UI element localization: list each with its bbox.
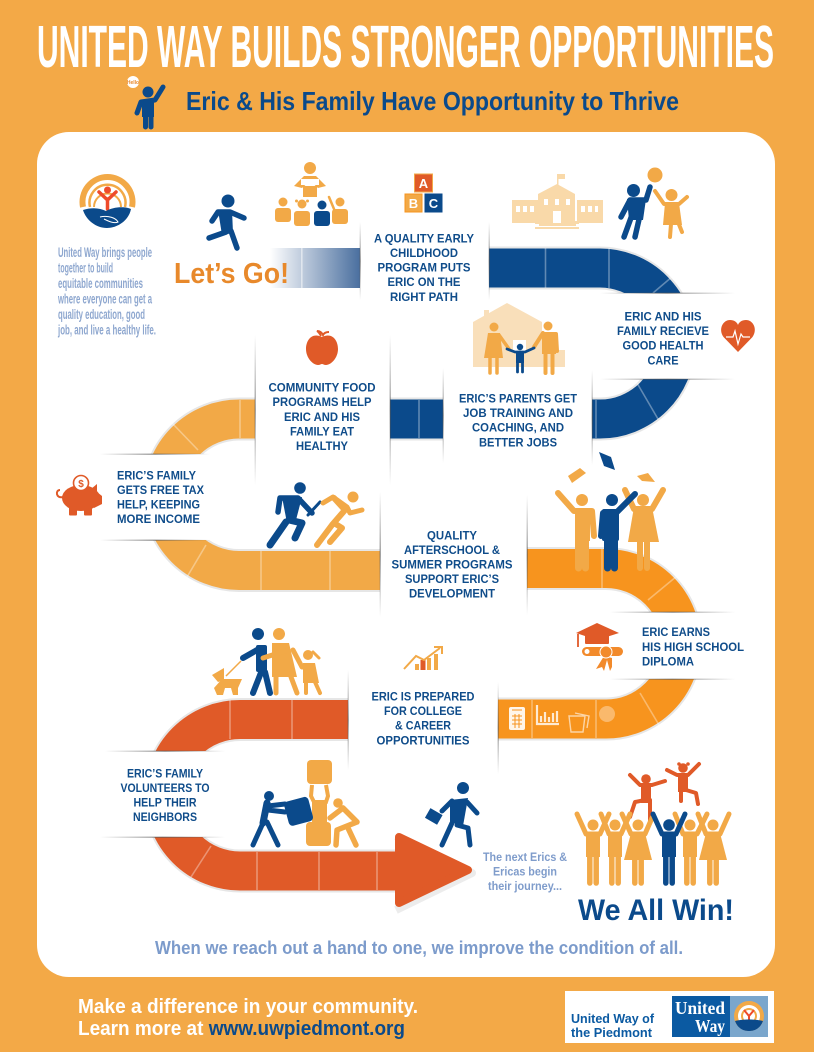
figures: yellow crowd — [577, 814, 729, 883]
text: afterschool: SUPPORT ERIC’S — [405, 572, 499, 586]
panel: community food — [254, 325, 391, 488]
text: job training: COACHING, AND — [472, 420, 564, 434]
text: job training: ERIC’S PARENTS GET — [459, 392, 577, 406]
text: volunteers: VOLUNTEERS TO — [120, 781, 210, 795]
icon: apple — [306, 331, 338, 365]
text: afterschool: AFTERSCHOOL & — [404, 543, 500, 557]
panel: afterschool — [380, 490, 528, 621]
icon: running Eric — [209, 194, 244, 248]
icon: house with family — [473, 303, 565, 373]
text: college and career: ERIC IS PREPARED — [372, 690, 475, 704]
text: job training — [459, 392, 577, 450]
text: tax help: MORE INCOME — [117, 512, 200, 526]
text: tax help: GETS FREE TAX — [117, 483, 205, 497]
text: college and career: & CAREER — [395, 718, 451, 732]
subtitle: Eric & His Family Have Opportunity to Thrive — [186, 86, 679, 116]
icon: school building — [512, 174, 603, 229]
text: early childhood: PROGRAM PUTS — [378, 260, 470, 274]
text: tax help: HELP, KEEPING — [117, 498, 200, 512]
text: intro blurb: together to build — [58, 260, 113, 276]
text: next Erics — [483, 850, 567, 893]
text: afterschool: QUALITY — [427, 528, 477, 542]
heading: We All Win: We All Win! — [578, 894, 734, 927]
text: volunteers: ERIC’S FAMILY — [127, 766, 203, 780]
panel: volunteers — [100, 750, 260, 838]
text: early childhood: ERIC ON THE — [388, 275, 460, 289]
text: job training: BETTER JOBS — [479, 436, 557, 450]
footer logo — [565, 991, 774, 1043]
panel: health care — [600, 292, 735, 380]
text: community food — [268, 380, 376, 453]
text: intro blurb — [57, 244, 156, 338]
text: intro blurb: United Way brings people — [58, 244, 152, 260]
text: diploma — [642, 625, 744, 668]
icon: crowd celebrating — [577, 762, 729, 883]
text: early childhood: A QUALITY EARLY — [374, 232, 474, 246]
figure: red climber — [630, 774, 665, 822]
panel: diploma — [600, 612, 744, 680]
footer logo: Way — [695, 1016, 725, 1036]
path: dark orange segment — [490, 549, 681, 738]
icon: ABC blocks: B — [409, 196, 418, 211]
text: volunteers — [120, 766, 210, 824]
icon: heart — [721, 320, 755, 352]
text: next Erics: Ericas begin — [493, 864, 557, 878]
text: community food: FAMILY EAT — [290, 424, 354, 438]
text: community food: ERIC AND HIS — [284, 410, 360, 424]
text: health care: GOOD HEALTH — [622, 338, 704, 352]
footer logo: the Piedmont — [571, 1025, 653, 1040]
icon: family walking dog — [212, 628, 320, 695]
text: early childhood: CHILDHOOD — [390, 246, 458, 260]
text: college and career: FOR COLLEGE — [384, 704, 462, 718]
icon: graduates — [558, 452, 663, 568]
icon: kids playing ball — [621, 168, 687, 237]
panel: job training — [442, 368, 593, 468]
icon: relay runners — [270, 482, 362, 545]
icon: ABC blocks: A — [419, 176, 429, 191]
text: volunteers: NEIGHBORS — [133, 810, 197, 824]
figure: blue person — [653, 814, 685, 883]
text: intro blurb: quality education, good — [58, 306, 145, 322]
path: light orange segment — [163, 400, 385, 590]
text: tax help: ERIC’S FAMILY — [117, 468, 196, 482]
icon: United Way hand logo — [82, 177, 133, 228]
text: volunteers: HELP THEIR — [134, 796, 197, 810]
text: intro blurb: equitable communities — [58, 275, 143, 291]
icon: Eric waving hello: Hello — [127, 80, 139, 86]
text: intro blurb: job, and live a healthy life. — [57, 322, 156, 338]
icon: piggy bank — [57, 476, 102, 516]
text: college and career: OPPORTUNITIES — [376, 734, 470, 748]
text: early childhood — [374, 232, 474, 304]
footer logo: United Way of — [571, 1011, 655, 1026]
text: community food: PROGRAMS HELP — [272, 395, 372, 409]
text: college and career — [372, 690, 475, 748]
footer logo: United — [675, 998, 725, 1018]
text: diploma: ERIC EARNS — [642, 625, 710, 639]
icon: cap and diploma — [576, 623, 623, 671]
text: community food: HEALTHY — [296, 439, 348, 453]
text: tax help — [117, 468, 205, 526]
panel: tax help — [57, 454, 255, 541]
icon: piggy bank: $ — [78, 479, 84, 490]
text: intro blurb: where everyone can get a — [57, 290, 152, 306]
path: blue segment — [360, 248, 676, 438]
text: diploma: DIPLOMA — [642, 654, 694, 668]
icons on dark orange track — [509, 705, 615, 732]
main white card — [37, 132, 775, 977]
footer call to action: Make a difference in your community. — [78, 996, 418, 1018]
text: health care — [617, 310, 709, 368]
icon: ABC blocks: C — [429, 196, 439, 211]
icon: teacher and children — [275, 162, 348, 226]
text: community food: COMMUNITY FOOD — [268, 380, 376, 394]
text: job training: JOB TRAINING AND — [463, 406, 573, 420]
icon: growth chart — [404, 647, 442, 670]
footer call to action: Learn more at www.uwpiedmont.org — [78, 1018, 405, 1040]
text: afterschool: SUMMER PROGRAMS — [392, 558, 512, 572]
text: health care: CARE — [648, 354, 678, 368]
text: afterschool: DEVELOPMENT — [409, 586, 495, 600]
path: red segment with arrow — [164, 700, 472, 910]
tagline: When we reach out a hand to one, we improve the condition of all. — [155, 938, 683, 958]
text: early childhood: RIGHT PATH — [390, 290, 458, 304]
text: health care: FAMILY RECIEVE — [617, 324, 709, 338]
path: start gradient bar — [270, 248, 360, 288]
footer call to action — [78, 996, 418, 1040]
icon: volunteers lifting blocks — [253, 760, 357, 846]
text: diploma: HIS HIGH SCHOOL — [642, 640, 744, 654]
heading: Let's Go: Let’s Go! — [174, 258, 289, 290]
text: next Erics: their journey... — [488, 879, 562, 893]
panel: college and career — [348, 647, 499, 775]
text: health care: ERIC AND HIS — [624, 310, 702, 324]
figure: red girl — [667, 762, 699, 804]
icon: Eric waving hello — [127, 76, 163, 127]
icon: ABC blocks — [405, 174, 442, 212]
icon: next Eric with briefcase — [425, 782, 477, 845]
text: afterschool — [392, 528, 512, 600]
panel: early childhood — [360, 215, 490, 307]
text: next Erics: The next Erics & — [483, 850, 567, 864]
